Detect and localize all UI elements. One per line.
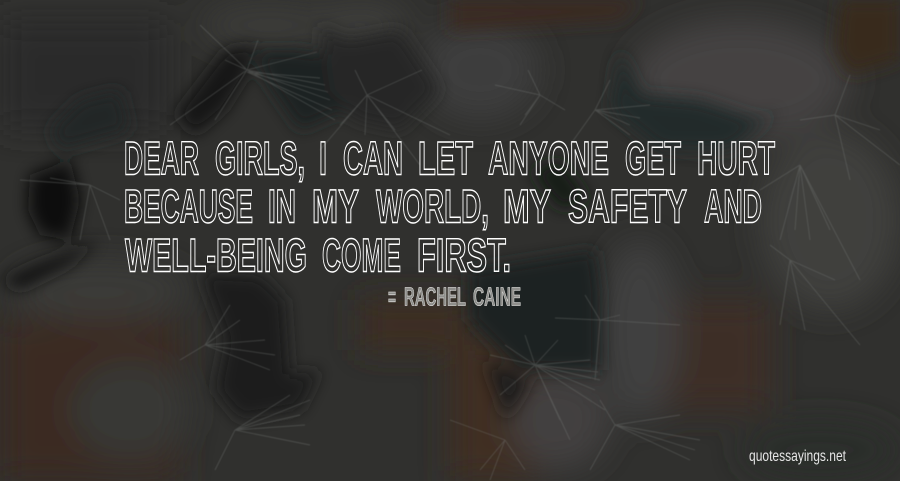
- quote text: [124, 132, 775, 282]
- quote text: COME: [322, 228, 401, 282]
- quote text: MY: [503, 180, 551, 232]
- author attribution: =: [388, 282, 396, 312]
- quote text: GIRLS,: [215, 132, 305, 184]
- quote text: MY: [312, 180, 359, 232]
- quote text: ANYONE: [488, 132, 609, 184]
- quote text: CAN: [343, 132, 403, 184]
- quote text: BECAUSE: [124, 180, 253, 232]
- quote text: WORLD,: [376, 180, 489, 232]
- author attribution: CAINE: [473, 282, 521, 312]
- quote text: HURT: [697, 132, 775, 184]
- quote text: GET: [625, 132, 681, 184]
- author attribution: RACHEL: [404, 282, 466, 312]
- quote text: FIRST.: [417, 228, 511, 282]
- quote text: DEAR: [124, 132, 199, 184]
- site watermark: quotessayings.net: [749, 448, 846, 465]
- quote text: AND: [704, 180, 762, 232]
- quote text: I: [319, 132, 327, 184]
- quote text: LET: [418, 132, 473, 184]
- quote text: SAFETY: [568, 180, 687, 232]
- quote text: WELL-BEING: [125, 228, 307, 282]
- quote text: IN: [268, 180, 296, 232]
